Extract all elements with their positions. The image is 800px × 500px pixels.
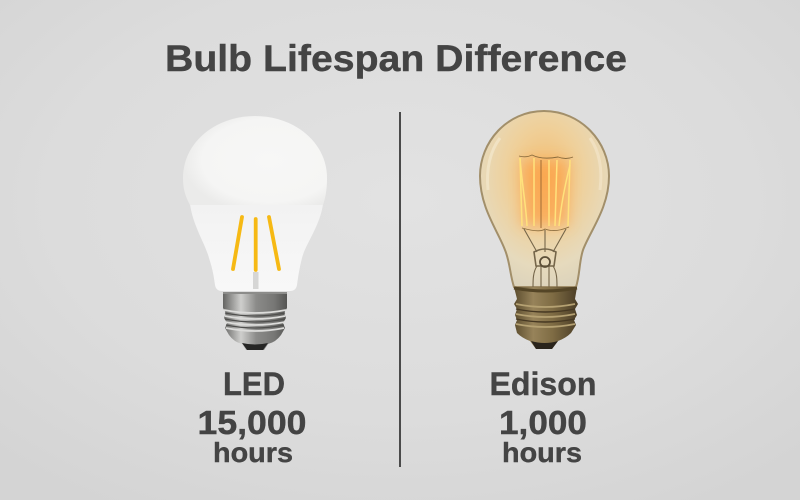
value: 1,000: 1,000 xyxy=(499,404,587,441)
icon: LED bulb xyxy=(183,116,327,350)
Edison support wires xyxy=(524,229,566,287)
LED filaments xyxy=(233,217,279,270)
Edison filament glow xyxy=(522,160,568,226)
LED frosted dome xyxy=(183,116,327,205)
LED lower body xyxy=(190,204,323,291)
center divider xyxy=(399,112,401,467)
value: 15,000: 15,000 xyxy=(198,404,306,441)
unit: hours (LED): hours xyxy=(213,437,293,468)
label: Edison: Edison xyxy=(490,366,596,402)
LED screw base xyxy=(223,292,287,350)
Edison glass envelope xyxy=(480,111,609,287)
icon: Edison bulb xyxy=(480,111,609,349)
LED stem xyxy=(253,272,258,289)
title: Bulb Lifespan Difference xyxy=(165,38,627,79)
Edison filament xyxy=(519,155,573,231)
label: LED: LED xyxy=(223,366,285,402)
Edison brass base xyxy=(514,287,578,349)
unit: hours (Edison): hours xyxy=(502,437,582,468)
